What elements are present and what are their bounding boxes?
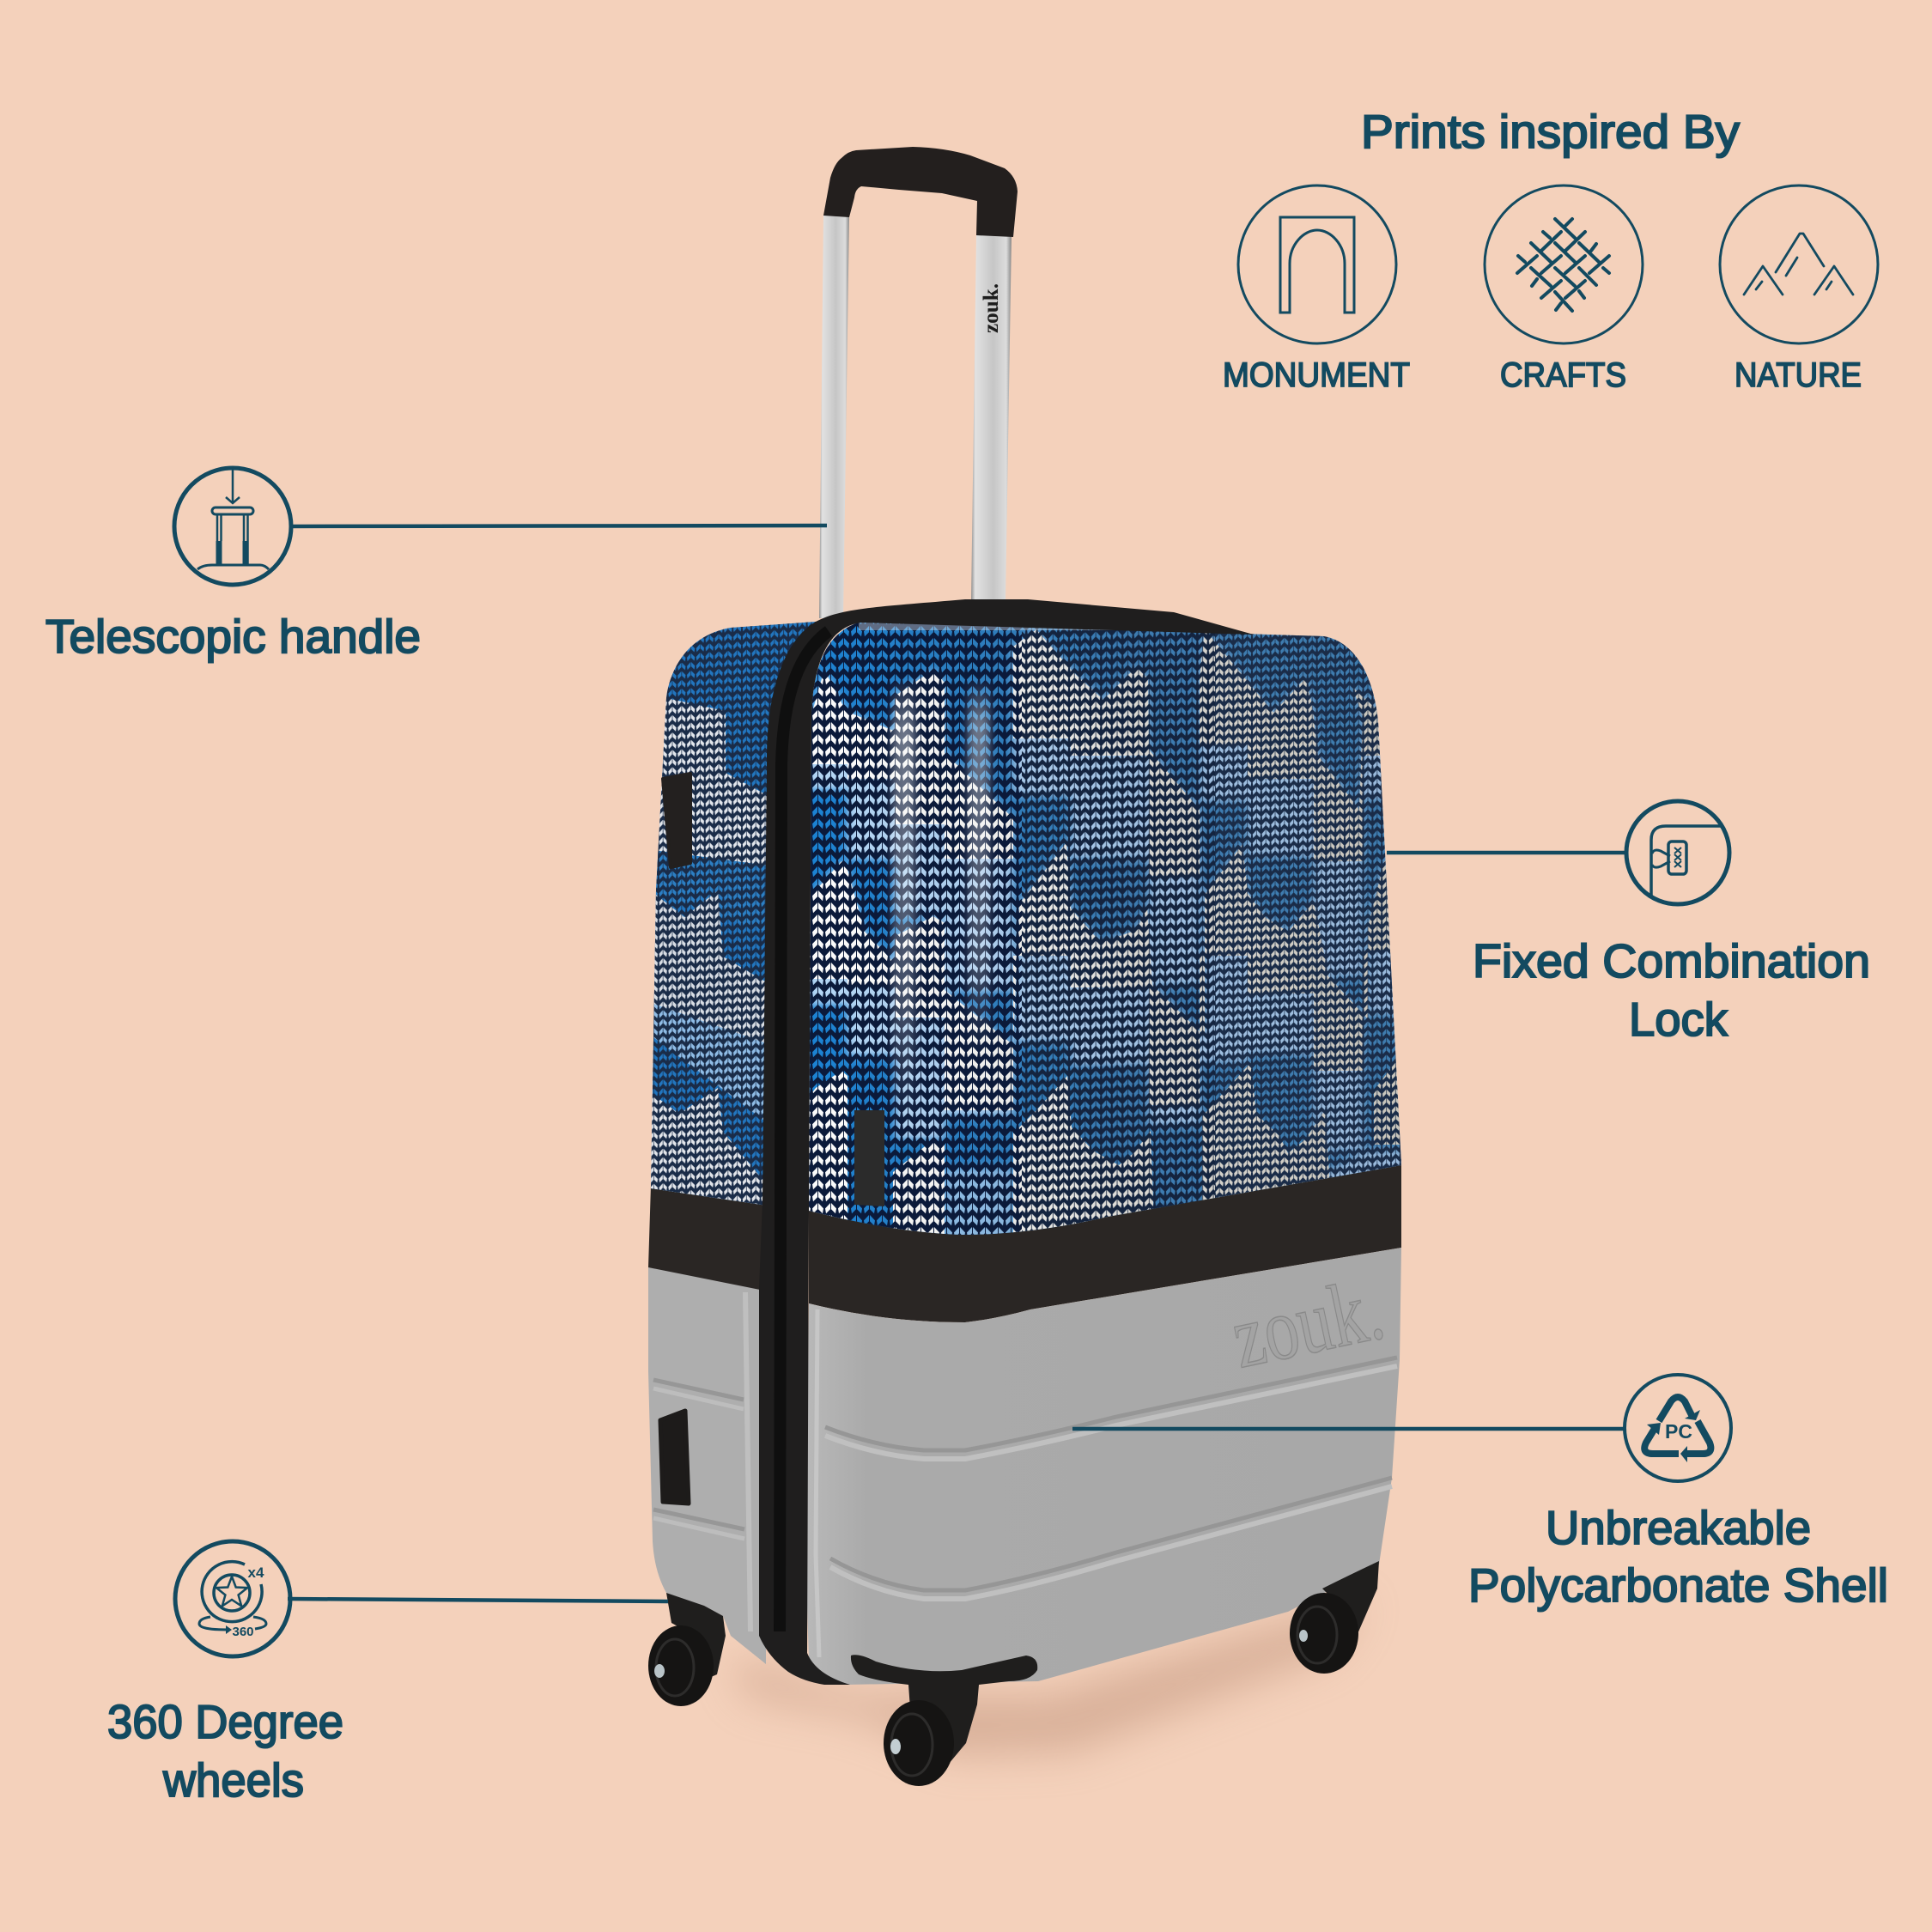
base blue	[799, 601, 1417, 1245]
prints heading: Prints inspired By	[1361, 105, 1741, 158]
prints panel	[1223, 105, 1878, 394]
icon: recycling PC: PC	[1665, 1420, 1692, 1443]
knit texture centre	[1022, 601, 1215, 1245]
lower grey side shell	[648, 1267, 766, 1664]
black side band	[648, 1185, 766, 1291]
label: 360 degree wheels	[107, 1695, 343, 1807]
side knit panel	[651, 622, 816, 1206]
shell left highlight	[816, 1309, 819, 1657]
embossed logo: zouk.	[1224, 1259, 1392, 1387]
label: telescopic handle: Telescopic handle	[46, 610, 421, 663]
wheel: front	[851, 1655, 1037, 1786]
icon: 360 wheel: x4	[248, 1564, 264, 1581]
grey front shell	[805, 1248, 1401, 1685]
front latch	[854, 1110, 884, 1206]
glossy reflections	[893, 678, 989, 1125]
feature: polycarbonate shell	[1468, 1375, 1888, 1612]
knit texture right	[1215, 634, 1401, 1198]
zip seam	[759, 599, 1254, 1685]
label: polycarbonate shell: Unbreakable	[1546, 1501, 1811, 1554]
label: polycarbonate shell: Polycarbonate Shell	[1468, 1558, 1888, 1612]
icon: 360 wheel: 360	[232, 1625, 254, 1639]
top sheen	[859, 623, 1113, 630]
handle logo: zouk.	[980, 283, 1003, 333]
icon: crafts	[1485, 185, 1643, 343]
suitcase	[635, 147, 1417, 1786]
leader line: combination lock	[1387, 851, 1625, 854]
telescopic handle	[819, 147, 1018, 618]
feature: combination lock	[1473, 801, 1870, 1046]
wheel: right back	[1290, 1561, 1379, 1674]
side ridges	[653, 1292, 750, 1631]
side handle upper	[663, 774, 690, 867]
label: combination lock	[1473, 934, 1870, 1046]
label: 360 degree wheels: 360 Degree	[107, 1695, 343, 1748]
feature: 360 degree wheels	[107, 1541, 343, 1807]
icon: combination lock	[1626, 801, 1729, 904]
monument label: MONUMENT	[1223, 356, 1410, 394]
feature: telescopic handle	[46, 468, 421, 663]
grey bands	[807, 629, 1417, 1245]
icon: nature	[1720, 185, 1878, 343]
floor shadow	[730, 1601, 1365, 1756]
side handle lower	[660, 1411, 689, 1504]
label: 360 degree wheels: wheels	[162, 1753, 304, 1807]
label: combination lock: Fixed Combination	[1473, 934, 1870, 987]
icon: 360 wheel	[175, 1541, 290, 1656]
leader line: polycarbonate shell	[1072, 1427, 1625, 1431]
right tube	[971, 235, 1012, 601]
shell ridges	[825, 1358, 1397, 1599]
knit texture left	[799, 601, 1022, 1245]
seam highlight	[780, 631, 829, 1631]
front knit panel	[799, 601, 1417, 1245]
leader line: wheels	[288, 1599, 668, 1601]
icon: monument	[1238, 185, 1396, 343]
black front band	[809, 1159, 1401, 1322]
label: polycarbonate shell	[1468, 1501, 1888, 1612]
icon: recycling PC	[1625, 1375, 1731, 1481]
label: combination lock: Lock	[1629, 993, 1728, 1046]
light bands	[807, 629, 1417, 1245]
crafts label: CRAFTS	[1500, 356, 1626, 394]
left tube	[819, 215, 849, 618]
handle grip	[823, 147, 1018, 237]
icon: telescopic handle	[174, 468, 291, 585]
wheel: left	[648, 1593, 726, 1706]
nature label: NATURE	[1735, 356, 1862, 394]
